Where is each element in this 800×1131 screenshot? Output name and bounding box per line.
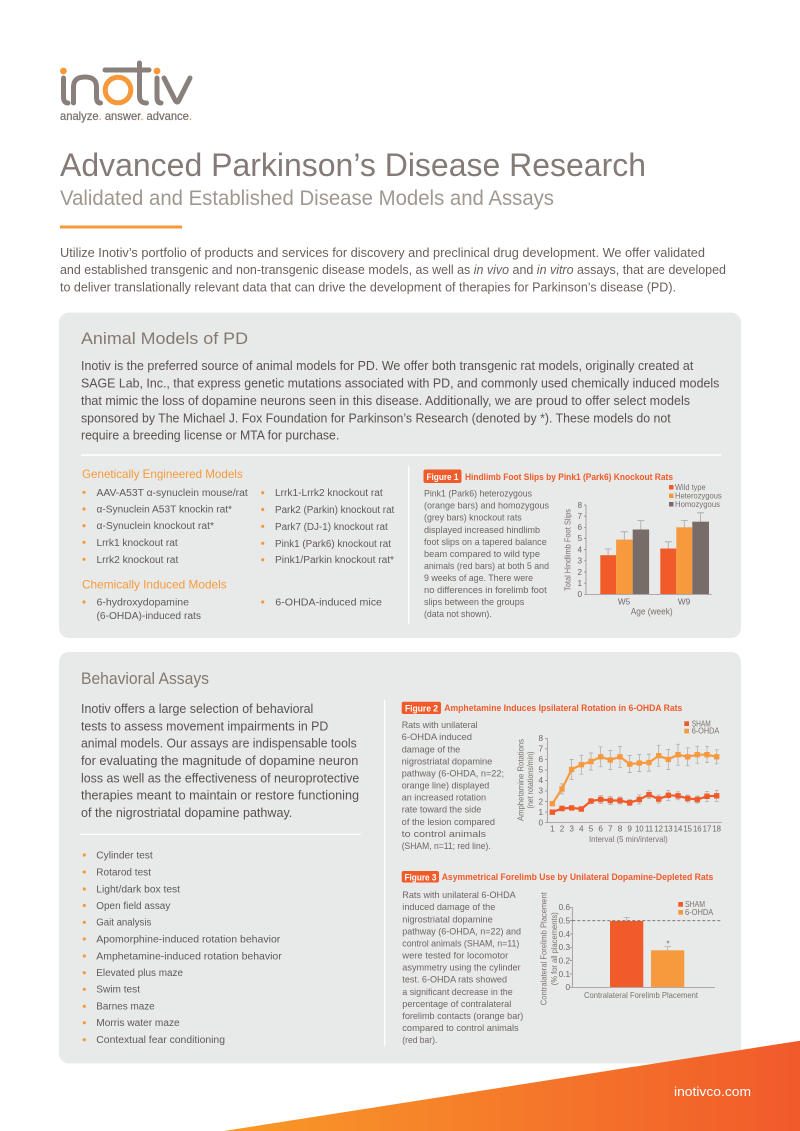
line chart: amphetamine rotations: 1 (538, 808, 543, 817)
intro text block: Utilize Inotiv’s portfolio of products and services for discovery and preclinical drug development. We offer validated (60, 245, 705, 260)
bar chart: hindlimb foot slips: 4 (577, 546, 582, 554)
line chart: amphetamine rotations: 8 (618, 824, 623, 834)
line chart: amphetamine rotations: 7 (538, 744, 543, 754)
line chart: amphetamine rotations: 1 (550, 824, 555, 834)
line chart: amphetamine rotations: 16 (693, 824, 702, 834)
behavioral assays description: animal models. Our assays are indispensable tools (81, 736, 357, 751)
bar chart: contralateral forelimb placement: Contralateral Forelimb Placement (540, 892, 548, 1005)
list: behavioral tests: Cylinder test (96, 850, 153, 861)
figure 1 description: (grey bars) knockout rats (424, 513, 522, 523)
bar chart: hindlimb foot slips: W5 (618, 598, 631, 606)
list: genetic models column 1: AAV-A53T α-synuclein mouse/rat (96, 488, 248, 499)
figure 3 description: percentage of contralateral (402, 999, 511, 1009)
figure 3 description: nigrostriatal dopamine (402, 914, 493, 924)
footer url: inotivco.com (674, 1084, 751, 1099)
list: behavioral tests: Gait analysis (96, 918, 151, 929)
panel: animal models of PD (59, 312, 741, 638)
bar chart: contralateral forelimb placement: 0.6 (559, 903, 570, 912)
bar chart: contralateral forelimb placement: 0.5 (559, 916, 570, 926)
footer wedge (224, 1041, 800, 1131)
figure 1 description: (orange bars) and homozygous (424, 501, 549, 511)
figure 2 description: to control animals (402, 829, 486, 839)
line chart: amphetamine rotations: 17 (703, 824, 711, 834)
animal models description: that mimic the loss of dopamine neurons seen in this disease. Additionally, we are proud to offer select models (81, 393, 690, 408)
figure 3 description: a significant decrease in the (402, 987, 513, 997)
figure 1 description: displayed increased hindlimb (424, 525, 540, 535)
bar chart: hindlimb foot slips: 2 (577, 568, 582, 577)
list: genetic models column 2: Pink1/Parkin knockout rat* (275, 555, 394, 566)
logo tagline: analyze. answer. advance. (60, 109, 192, 123)
figure 2 description: (SHAM, n=11; red line). (402, 841, 491, 851)
line chart: amphetamine rotations: 6 (538, 755, 543, 764)
figure 2 badge: Figure 2 (405, 702, 438, 714)
bar chart: hindlimb foot slips: 6 (577, 523, 582, 532)
figure 1 description: (data not shown). (424, 609, 492, 619)
behavioral assays description: for evaluating the magnitude of dopamine neuron (81, 753, 358, 768)
line chart: amphetamine rotations: 4 (538, 776, 543, 785)
list: genetic models column 1 (82, 488, 248, 566)
figure 1 title: Hindlimb Foot Slips by Pink1 (Park6) Knockout Rats (465, 471, 673, 482)
figure 1 description: no differences in forelimb foot (424, 585, 547, 595)
figure 1 description: Pink1 (Park6) heterozygous (424, 488, 532, 498)
list: genetic models column 2: Pink1 (Park6) knockout rat (275, 539, 391, 550)
subtitle: Validated and Established Disease Models and Assays (60, 187, 554, 210)
bar chart: contralateral forelimb placement: * (666, 940, 670, 948)
animal models description: Inotiv is the preferred source of animal models for PD. We offer both transgenic rat models, originally created at (81, 358, 694, 373)
line chart: amphetamine rotations: 13 (664, 824, 673, 834)
bar chart: contralateral forelimb placement: 0.2 (559, 956, 570, 966)
bar chart: hindlimb foot slips: 7 (577, 512, 582, 521)
figure 3 title: Asymmetrical Forelimb Use by Unilateral Dopamine-Depleted Rats (442, 871, 713, 882)
logo: inotiv (60, 63, 192, 123)
bar chart: contralateral forelimb placement (540, 892, 721, 1005)
line chart: amphetamine rotations: 4 (579, 824, 584, 834)
chart legend: SHAM (685, 900, 705, 909)
intro text block: and established transgenic and non-transgenic disease models, as well as in vivo and in vitro assays, that are developed (60, 262, 726, 277)
heading: animal models: Animal Models of PD (81, 329, 248, 348)
bar chart: contralateral forelimb placement: Contralateral Forelimb Placement (584, 991, 699, 1000)
line chart: amphetamine rotations: 3 (538, 787, 543, 796)
bar chart: hindlimb foot slips: 0 (577, 590, 582, 599)
bar chart: contralateral forelimb placement: 0.4 (559, 930, 570, 939)
animal models description (81, 358, 719, 442)
chart legend (669, 483, 722, 509)
bar chart: hindlimb foot slips: Age (week) (631, 606, 673, 616)
list: behavioral tests: Elevated plus maze (96, 968, 183, 979)
line chart: amphetamine rotations: 6 (598, 824, 603, 834)
line chart: amphetamine rotations: 18 (712, 824, 721, 834)
bar chart: hindlimb foot slips: Total Hindlimb Foot Slips (563, 509, 572, 591)
animal models description: require a breeding license or MTA for purchase. (81, 428, 339, 442)
list: chemically induced models: 6-OHDA-induced mice (275, 598, 382, 608)
intro text block: to deliver translationally relevant data that can drive the development of therapies for Parkinson’s disease (PD). (60, 280, 676, 294)
figure 3 description: test. 6-OHDA rats showed (402, 974, 507, 984)
list: behavioral tests: Amphetamine-induced rotation behavior (96, 951, 282, 962)
behavioral assays description: of the nigrostriatal dopamine pathway. (81, 805, 292, 820)
list: genetic models column 1: α-Synuclein knockout rat* (96, 521, 214, 532)
figure 1 badge: Figure 1 (426, 471, 458, 482)
list: genetic models column 2 (261, 488, 395, 566)
line chart: amphetamine rotations: 2 (538, 797, 543, 806)
figure 3 description: pathway (6-OHDA, n=22) and (402, 926, 521, 936)
list: genetic models column 1: α-Synuclein A53T knockin rat* (96, 504, 232, 516)
behavioral assays description (81, 701, 359, 820)
figure 3 badge: Figure 3 (404, 872, 436, 882)
figure 2 description: damage of the (402, 744, 460, 754)
bar chart: hindlimb foot slips: 8 (577, 501, 582, 510)
line chart: amphetamine rotations: Amphetamine Rotations (516, 739, 526, 821)
figure 2 description: of the lesion compared (402, 817, 495, 827)
chart legend: SHAM (692, 719, 711, 728)
figure 3 description: (red bar). (402, 1035, 437, 1045)
list: genetic models column 2: Park7 (DJ-1) knockout rat (275, 522, 388, 533)
list: genetic models column 1: Lrrk2 knockout rat (96, 555, 179, 566)
chart legend: Heterozygous (675, 492, 722, 500)
title: Advanced Parkinson’s Disease Research (60, 147, 646, 183)
animal models description: SAGE Lab, Inc., that express genetic mutations associated with PD, and commonly used chemically induced models (81, 376, 719, 390)
figure 3 description (401, 890, 523, 1045)
line chart: amphetamine rotations: 12 (654, 824, 663, 834)
line chart: amphetamine rotations: 3 (569, 824, 574, 834)
bar chart: hindlimb foot slips (563, 483, 722, 616)
figure 2 description: Rats with unilateral (402, 720, 478, 730)
figure 3 description: were tested for locomotor (401, 950, 508, 960)
chart legend: Wild type (675, 483, 706, 492)
figure 1 description: foot slips on a tapered balance (424, 537, 547, 547)
list: genetic models column 2: Park2 (Parkin) knockout rat (275, 505, 395, 516)
list: genetic models column 1: Lrrk1 knockout rat (96, 538, 178, 549)
bar chart: contralateral forelimb placement: 0.3 (559, 943, 570, 952)
figure 2 description: rate toward the side (402, 804, 481, 814)
line chart: amphetamine rotations: 7 (608, 824, 613, 834)
figure 3 description: Rats with unilateral 6-OHDA (402, 890, 517, 900)
figure 1 description (424, 488, 549, 619)
figure 2 description: orange line) displayed (402, 780, 489, 790)
behavioral assays description: loss as well as the effectiveness of neuroprotective (81, 770, 359, 785)
bar chart: contralateral forelimb placement: (% for all placements) (550, 912, 559, 985)
list: behavioral tests: Rotarod test (96, 868, 151, 878)
figure 2 (402, 702, 722, 851)
chart legend (678, 900, 714, 917)
figure 3 description: forelimb contacts (orange bar) (402, 1011, 523, 1021)
figure 2 description (402, 720, 504, 851)
line chart: amphetamine rotations: (net rotations/min) (526, 751, 535, 808)
bar chart: contralateral forelimb placement: 0.1 (559, 970, 570, 979)
intro text block (60, 245, 726, 294)
chart legend (684, 719, 720, 736)
figure 3 description: compared to control animals (402, 1023, 519, 1033)
list: behavioral tests: Morris water maze (96, 1018, 180, 1029)
subheading: chemically induced models: Chemically Induced Models (82, 578, 227, 592)
chart legend: Homozygous (675, 500, 720, 509)
figure 2 description: 6-OHDA induced (402, 732, 472, 742)
behavioral assays description: Inotiv offers a large selection of behavioral (81, 701, 313, 716)
list: behavioral tests: Apomorphine-induced rotation behavior (96, 934, 281, 945)
line chart: amphetamine rotations: Interval (5 min/interval) (589, 835, 668, 844)
chart legend: 6-OHDA (685, 908, 714, 917)
list: behavioral tests: Contextual fear conditioning (96, 1035, 225, 1046)
line chart: amphetamine rotations: 8 (538, 734, 543, 743)
list: chemically induced models (82, 598, 382, 622)
figure 1 description: slips between the groups (424, 597, 525, 607)
behavioral assays description: tests to assess movement impairments in PD (81, 718, 328, 733)
line chart: amphetamine rotations: 10 (635, 824, 644, 834)
list: behavioral tests: Swim test (96, 985, 140, 996)
line chart: amphetamine rotations: 0 (538, 818, 543, 828)
animal models description: sponsored by The Michael J. Fox Foundation for Parkinson’s Research (denoted by *). These models do not (81, 410, 671, 425)
list: chemically induced models: 6-hydroxydopamine (96, 598, 189, 608)
chart legend: 6-OHDA (692, 727, 720, 736)
bar chart: hindlimb foot slips: W9 (678, 598, 691, 606)
figure 2 description: nigrostriatal dopamine (402, 756, 492, 766)
figure 2 description: an increased rotation (402, 792, 486, 802)
line chart: amphetamine rotations: 11 (645, 824, 653, 834)
figure 1 description: animals (red bars) at both 5 and (424, 561, 549, 571)
figure 2 description: pathway (6-OHDA, n=22; (402, 768, 504, 778)
list: behavioral tests: Barnes maze (96, 1002, 155, 1013)
subheading: genetically engineered models: Genetically Engineered Models (82, 467, 243, 481)
behavioral assays description: therapies meant to maintain or restore functioning (81, 788, 359, 803)
figure 3 description: control animals (SHAM, n=11) (402, 938, 519, 948)
line chart: amphetamine rotations: 9 (627, 824, 632, 834)
bar chart: hindlimb foot slips: 3 (577, 556, 582, 566)
heading: behavioral assays: Behavioral Assays (81, 669, 209, 688)
panel: behavioral assays (59, 652, 741, 1064)
figure 1 description: 9 weeks of age. There were (424, 573, 533, 583)
line chart: amphetamine rotations: 2 (560, 824, 565, 834)
bar chart: contralateral forelimb placement: 0 (565, 983, 570, 992)
bar chart: hindlimb foot slips: 1 (577, 579, 582, 588)
figure 3 description: induced damage of the (402, 902, 495, 912)
orange title rule (60, 226, 182, 228)
bar chart: hindlimb foot slips: 5 (577, 534, 582, 543)
list: behavioral tests: Light/dark box test (96, 884, 180, 895)
list: behavioral tests: Open field assay (96, 901, 170, 912)
line chart: amphetamine rotations: 14 (674, 824, 683, 834)
line chart: amphetamine rotations (516, 719, 722, 844)
list: behavioral tests (83, 850, 282, 1046)
figure 3 (401, 871, 721, 1045)
list: chemically induced models: (6-OHDA)-induced rats (96, 611, 201, 622)
figure 1 (424, 470, 722, 619)
line chart: amphetamine rotations: 5 (589, 824, 594, 834)
list: genetic models column 2: Lrrk1-Lrrk2 knockout rat (275, 488, 383, 499)
figure 1 description: beam compared to wild type (424, 549, 540, 559)
line chart: amphetamine rotations: 5 (538, 766, 543, 774)
figure 2 title: Amphetamine Induces Ipsilateral Rotation in 6-OHDA Rats (444, 702, 682, 713)
line chart: amphetamine rotations: 15 (683, 824, 693, 834)
figure 3 description: asymmetry using the cylinder (402, 962, 521, 972)
